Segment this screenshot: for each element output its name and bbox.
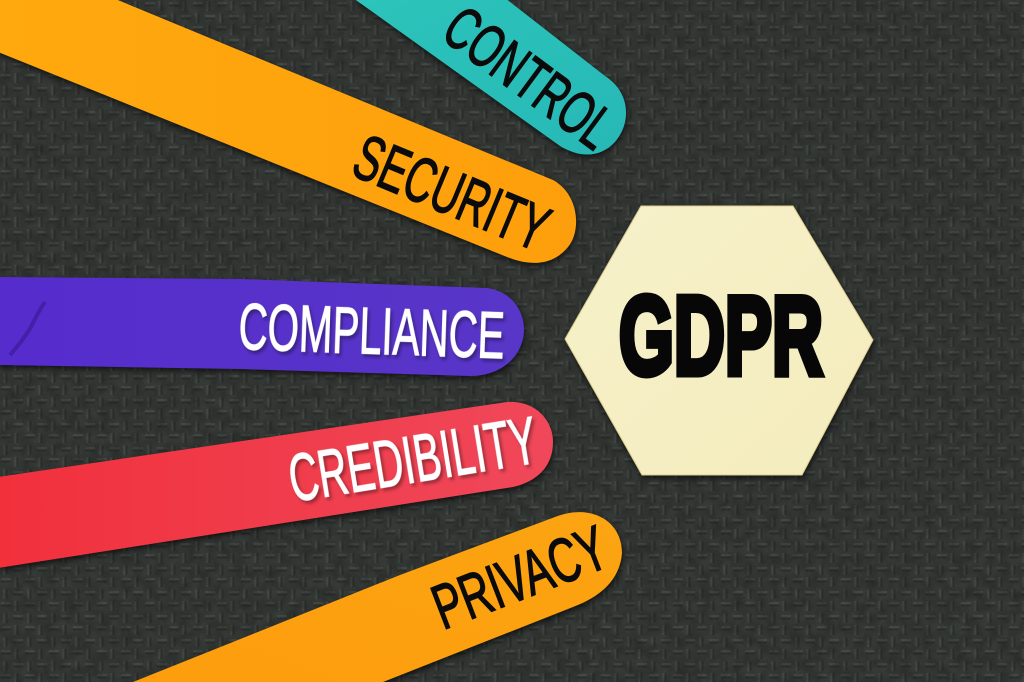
stick: compliance xyxy=(0,277,524,376)
hexagon badge: GDPR xyxy=(565,206,873,475)
label: GDPR: GDPR xyxy=(619,274,823,398)
stick: credibility xyxy=(0,402,553,568)
scratch on purple stick xyxy=(10,302,45,355)
label: credibility: CREDIBILITY xyxy=(283,403,542,517)
stick: control xyxy=(353,0,627,162)
stick: privacy xyxy=(128,512,622,682)
label: compliance: COMPLIANCE xyxy=(238,289,506,372)
label: privacy: PRIVACY xyxy=(423,513,617,643)
stick: security xyxy=(0,0,576,265)
label: security: SECURITY xyxy=(344,120,560,265)
